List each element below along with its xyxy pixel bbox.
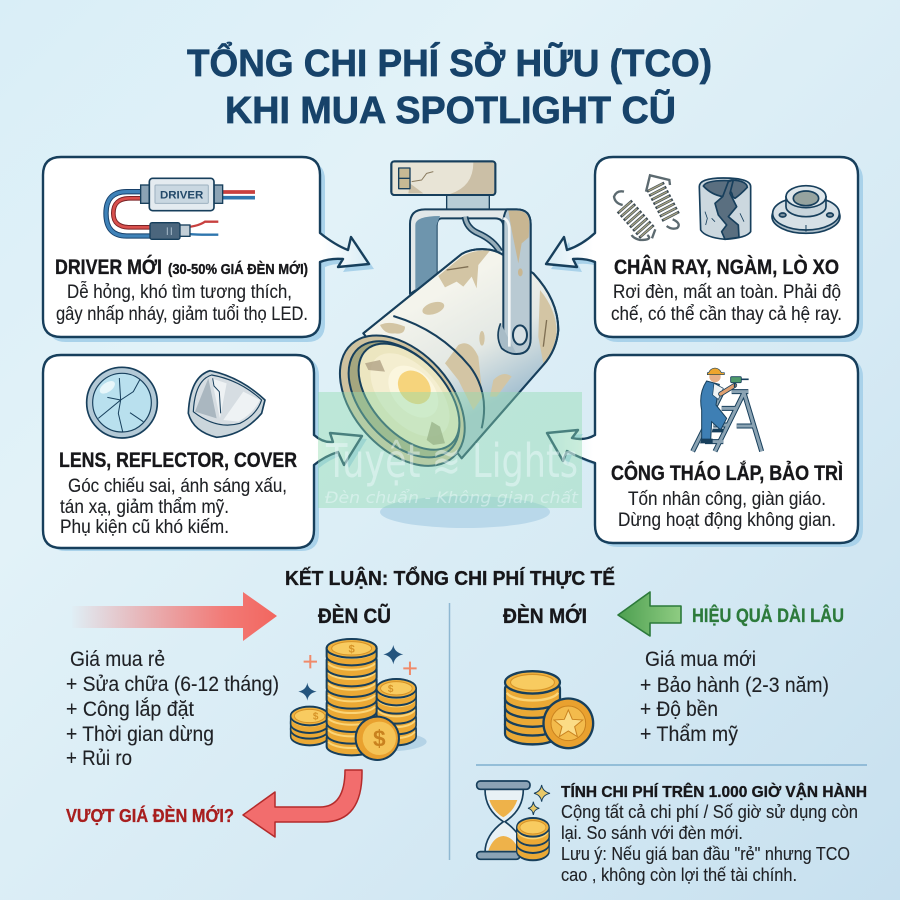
text: cost per 1000 hours (561, 782, 867, 885)
icon: stacked coins: $ (348, 643, 355, 655)
title: TỔNG CHI PHÍ SỞ HỮU (TCO) (187, 40, 712, 85)
text: old lamp cost list: + Thời gian dừng (66, 723, 214, 746)
arrow: curved red (243, 770, 362, 837)
panel: rail parts (546, 157, 863, 342)
text: new lamp cost list: + Độ bền (640, 698, 718, 721)
icon: nut (772, 186, 840, 233)
stains (380, 250, 557, 410)
text: old lamp cost list: Giá mua rẻ (70, 648, 165, 671)
description: Rơi đèn, mất an toàn. Phải độ (613, 282, 841, 303)
conclusion heading: KẾT LUẬN: TỔNG CHI PHÍ THỰC TẾ (285, 566, 615, 590)
icon: driver (106, 178, 255, 239)
text: exceeds new lamp price: VƯỢT GIÁ ĐÈN MỚI? (66, 805, 234, 826)
text: old lamp cost list: + Sửa chữa (6-12 tháng) (66, 673, 279, 696)
arrow: green to new lamp (618, 592, 681, 636)
icon: stacked coins: $ (373, 726, 386, 752)
icon: stacked coins (291, 639, 427, 761)
arrow: red to old lamp (72, 592, 277, 641)
heading: CHÂN RAY, NGÀM, LÒ XO (614, 255, 839, 279)
text: old lamp cost list (66, 648, 279, 770)
icon: cracked lens (87, 367, 157, 438)
icon: stacked coins: $ (388, 684, 394, 695)
description (611, 282, 842, 325)
divider (448, 603, 450, 860)
band line (393, 316, 484, 428)
text: cost per 1000 hours: TÍNH CHI PHÍ TRÊN 1.000 GIỜ VẬN HÀNH (561, 782, 867, 801)
shadow under lamp (380, 496, 550, 528)
title (187, 40, 712, 132)
icon: stacked coins: $ (313, 711, 319, 722)
icon: springs (614, 175, 679, 240)
divider (476, 764, 867, 766)
description: Phụ kiện cũ khó kiếm. (60, 517, 229, 538)
icon: worker on ladder (693, 368, 762, 451)
description: gây nhấp nháy, giảm tuổi thọ LED. (56, 304, 308, 325)
heading: old lamp: ĐÈN CŨ (318, 603, 391, 628)
text: cost per 1000 hours: lại. So sánh với đèn mới. (561, 823, 743, 843)
description: Dễ hỏng, khó tìm tương thích, (67, 281, 292, 303)
heading: DRIVER MỚI (55, 255, 162, 279)
description: Dừng hoạt động không gian. (618, 510, 836, 531)
icon: hourglass with coins (477, 781, 550, 860)
description (618, 489, 836, 531)
panel: driver (43, 157, 374, 342)
text: cost per 1000 hours: Cộng tất cả chi phí / Số giờ sử dụng còn (561, 802, 858, 822)
text: old lamp cost list: + Rủi ro (66, 747, 132, 770)
sub heading: (30-50% GIÁ ĐÈN MỚI) (168, 260, 308, 278)
lamp face (315, 312, 489, 490)
description (60, 476, 287, 538)
text: cost per 1000 hours: cao , không còn lợi thế tài chính. (561, 865, 797, 885)
heading: LENS, REFLECTOR, COVER (59, 449, 297, 472)
panel: installation labor (547, 355, 863, 547)
sparkles (298, 645, 403, 701)
text: new lamp cost list (640, 648, 829, 746)
panel: lens, reflector, cover (43, 355, 367, 551)
text: long term efficiency: HIỆU QUẢ DÀI LÂU (692, 605, 844, 627)
text: new lamp cost list: + Thẩm mỹ (640, 723, 738, 746)
watermark: Đèn chuẩn - Không gian chất (325, 488, 579, 507)
text: new lamp cost list: Giá mua mới (645, 648, 756, 671)
icon: broken sleeve (699, 178, 751, 239)
icon: reflector (188, 371, 265, 437)
watermark: Tuyệt ≋ Lights (325, 434, 578, 488)
description: Góc chiếu sai, ánh sáng xấu, (68, 476, 287, 497)
text: old lamp cost list: + Công lắp đặt (66, 698, 194, 721)
description: Tốn nhân công, giàn giáo. (628, 489, 826, 510)
icon: old spotlight (315, 161, 558, 490)
title: KHI MUA SPOTLIGHT CŨ (225, 88, 676, 132)
yoke front arm (503, 209, 531, 354)
text: cost per 1000 hours: Lưu ý: Nếu giá ban đầu "rẻ" nhưng TCO (561, 844, 850, 864)
icon: driver: DRIVER (160, 190, 203, 202)
yoke back (410, 209, 531, 294)
lamp body (363, 249, 558, 458)
heading: CÔNG THÁO LẮP, BẢO TRÌ (611, 461, 843, 485)
text: new lamp cost list: + Bảo hành (2-3 năm) (640, 674, 829, 697)
heading: new lamp: ĐÈN MỚI (503, 603, 587, 628)
description (56, 281, 308, 325)
mount (391, 161, 495, 209)
description: tán xạ, giảm thẩm mỹ. (60, 497, 229, 518)
icon: new coins (505, 671, 594, 749)
description: chế, có thể cần thay cả hệ ray. (611, 304, 842, 325)
watermark (318, 392, 582, 508)
